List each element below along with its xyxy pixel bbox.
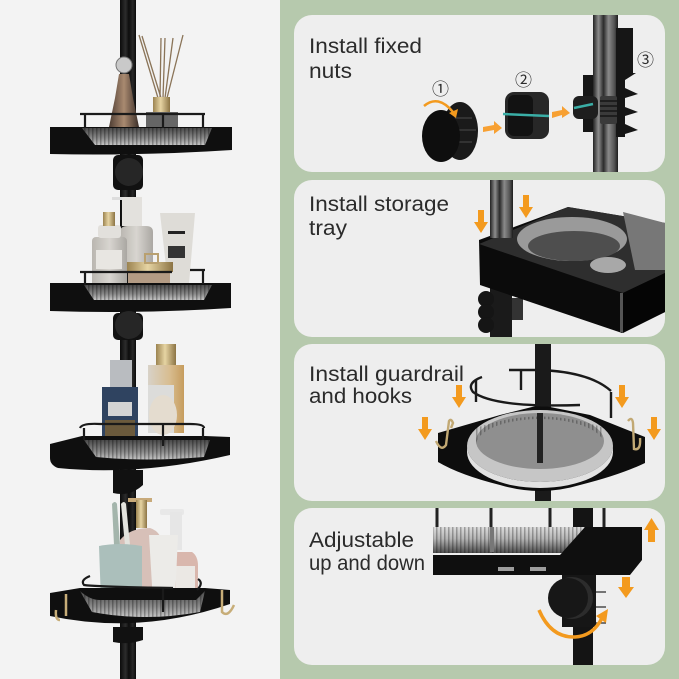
arrow bbox=[615, 385, 629, 408]
tube bbox=[160, 213, 195, 284]
reed diffuser bbox=[139, 35, 183, 128]
step numbers: ② bbox=[515, 71, 532, 90]
arrow bbox=[452, 385, 466, 408]
guardrail 4 bbox=[83, 576, 201, 612]
heading: adjustable up and down: up and down bbox=[309, 552, 425, 575]
tray 2 body bbox=[50, 283, 231, 312]
rose pump bottle bbox=[120, 498, 163, 600]
illustration: tray side view with knob bbox=[433, 508, 642, 665]
heading: install storage tray: Install storage bbox=[309, 193, 449, 216]
arrow bbox=[647, 417, 661, 440]
clear bowl 3 bbox=[84, 440, 210, 460]
perfume bottle bbox=[109, 57, 139, 127]
blue serum bottle bbox=[102, 360, 138, 440]
panel: install guardrail and hooks bbox=[294, 344, 665, 504]
tray 3 body bbox=[50, 436, 230, 470]
jar and brush bbox=[127, 254, 173, 287]
tier 4 shelf bbox=[50, 498, 234, 643]
tall amber bottle bbox=[148, 344, 184, 435]
heading: install guardrail and hooks: Install guardrail bbox=[309, 363, 464, 386]
heading: install fixed nuts: nuts bbox=[309, 60, 352, 83]
pump bottle white bbox=[112, 197, 153, 270]
heading: install fixed nuts: Install fixed bbox=[309, 35, 422, 58]
guardrail 3 bbox=[80, 424, 204, 446]
arrow bbox=[644, 518, 659, 542]
step numbers: ① bbox=[432, 80, 449, 99]
arrow bbox=[519, 195, 533, 218]
white tube bbox=[149, 535, 178, 602]
tier 1 shelf bbox=[50, 35, 232, 190]
clear bowl 1 bbox=[82, 128, 212, 145]
adjuster knob 2 bbox=[113, 311, 143, 340]
icon: pole with bracket bbox=[573, 15, 638, 172]
illustration: tray with guardrail bbox=[436, 344, 645, 504]
adjuster knob 3 bbox=[113, 470, 143, 494]
guardrail 2 bbox=[80, 270, 205, 285]
cup bbox=[99, 544, 142, 602]
panel: install storage tray bbox=[294, 180, 665, 337]
tier 3 shelf bbox=[50, 344, 230, 494]
icon: spacer block bbox=[503, 92, 549, 139]
tray 4 body bbox=[50, 588, 230, 623]
arrow: rotate bbox=[539, 609, 608, 637]
panel: install fixed nuts bbox=[294, 15, 665, 172]
toothbrushes bbox=[112, 502, 130, 545]
arrow bbox=[474, 210, 488, 233]
heading: install storage tray: tray bbox=[309, 217, 348, 240]
step numbers bbox=[432, 51, 654, 99]
illustration: tray on pole bbox=[478, 180, 665, 337]
arrow bbox=[618, 577, 634, 598]
icon: knob bbox=[422, 101, 478, 162]
green background panel bbox=[280, 0, 679, 679]
adjuster knob 4 bbox=[113, 627, 143, 643]
adjuster knob 1 bbox=[113, 155, 143, 190]
shelf unit product photo bbox=[50, 0, 234, 679]
arrow bbox=[418, 417, 432, 440]
clear bowl 4 bbox=[80, 591, 205, 617]
heading: adjustable up and down: Adjustable bbox=[309, 529, 414, 552]
tension pole bbox=[120, 0, 136, 679]
clear bowl 2 bbox=[84, 285, 212, 300]
glass bottle bbox=[92, 212, 127, 287]
arrow bbox=[483, 121, 502, 134]
pink pump bottle bbox=[160, 509, 198, 603]
left background bbox=[0, 0, 280, 679]
panel: adjustable up and down bbox=[294, 508, 665, 665]
tier 2 shelf bbox=[50, 197, 231, 340]
arrow bbox=[552, 106, 570, 118]
step numbers: ③ bbox=[637, 51, 654, 70]
heading: install guardrail and hooks: and hooks bbox=[309, 385, 412, 408]
guardrail 1 bbox=[80, 114, 205, 128]
gold hooks bbox=[56, 590, 234, 620]
tray 1 body bbox=[50, 127, 232, 154]
